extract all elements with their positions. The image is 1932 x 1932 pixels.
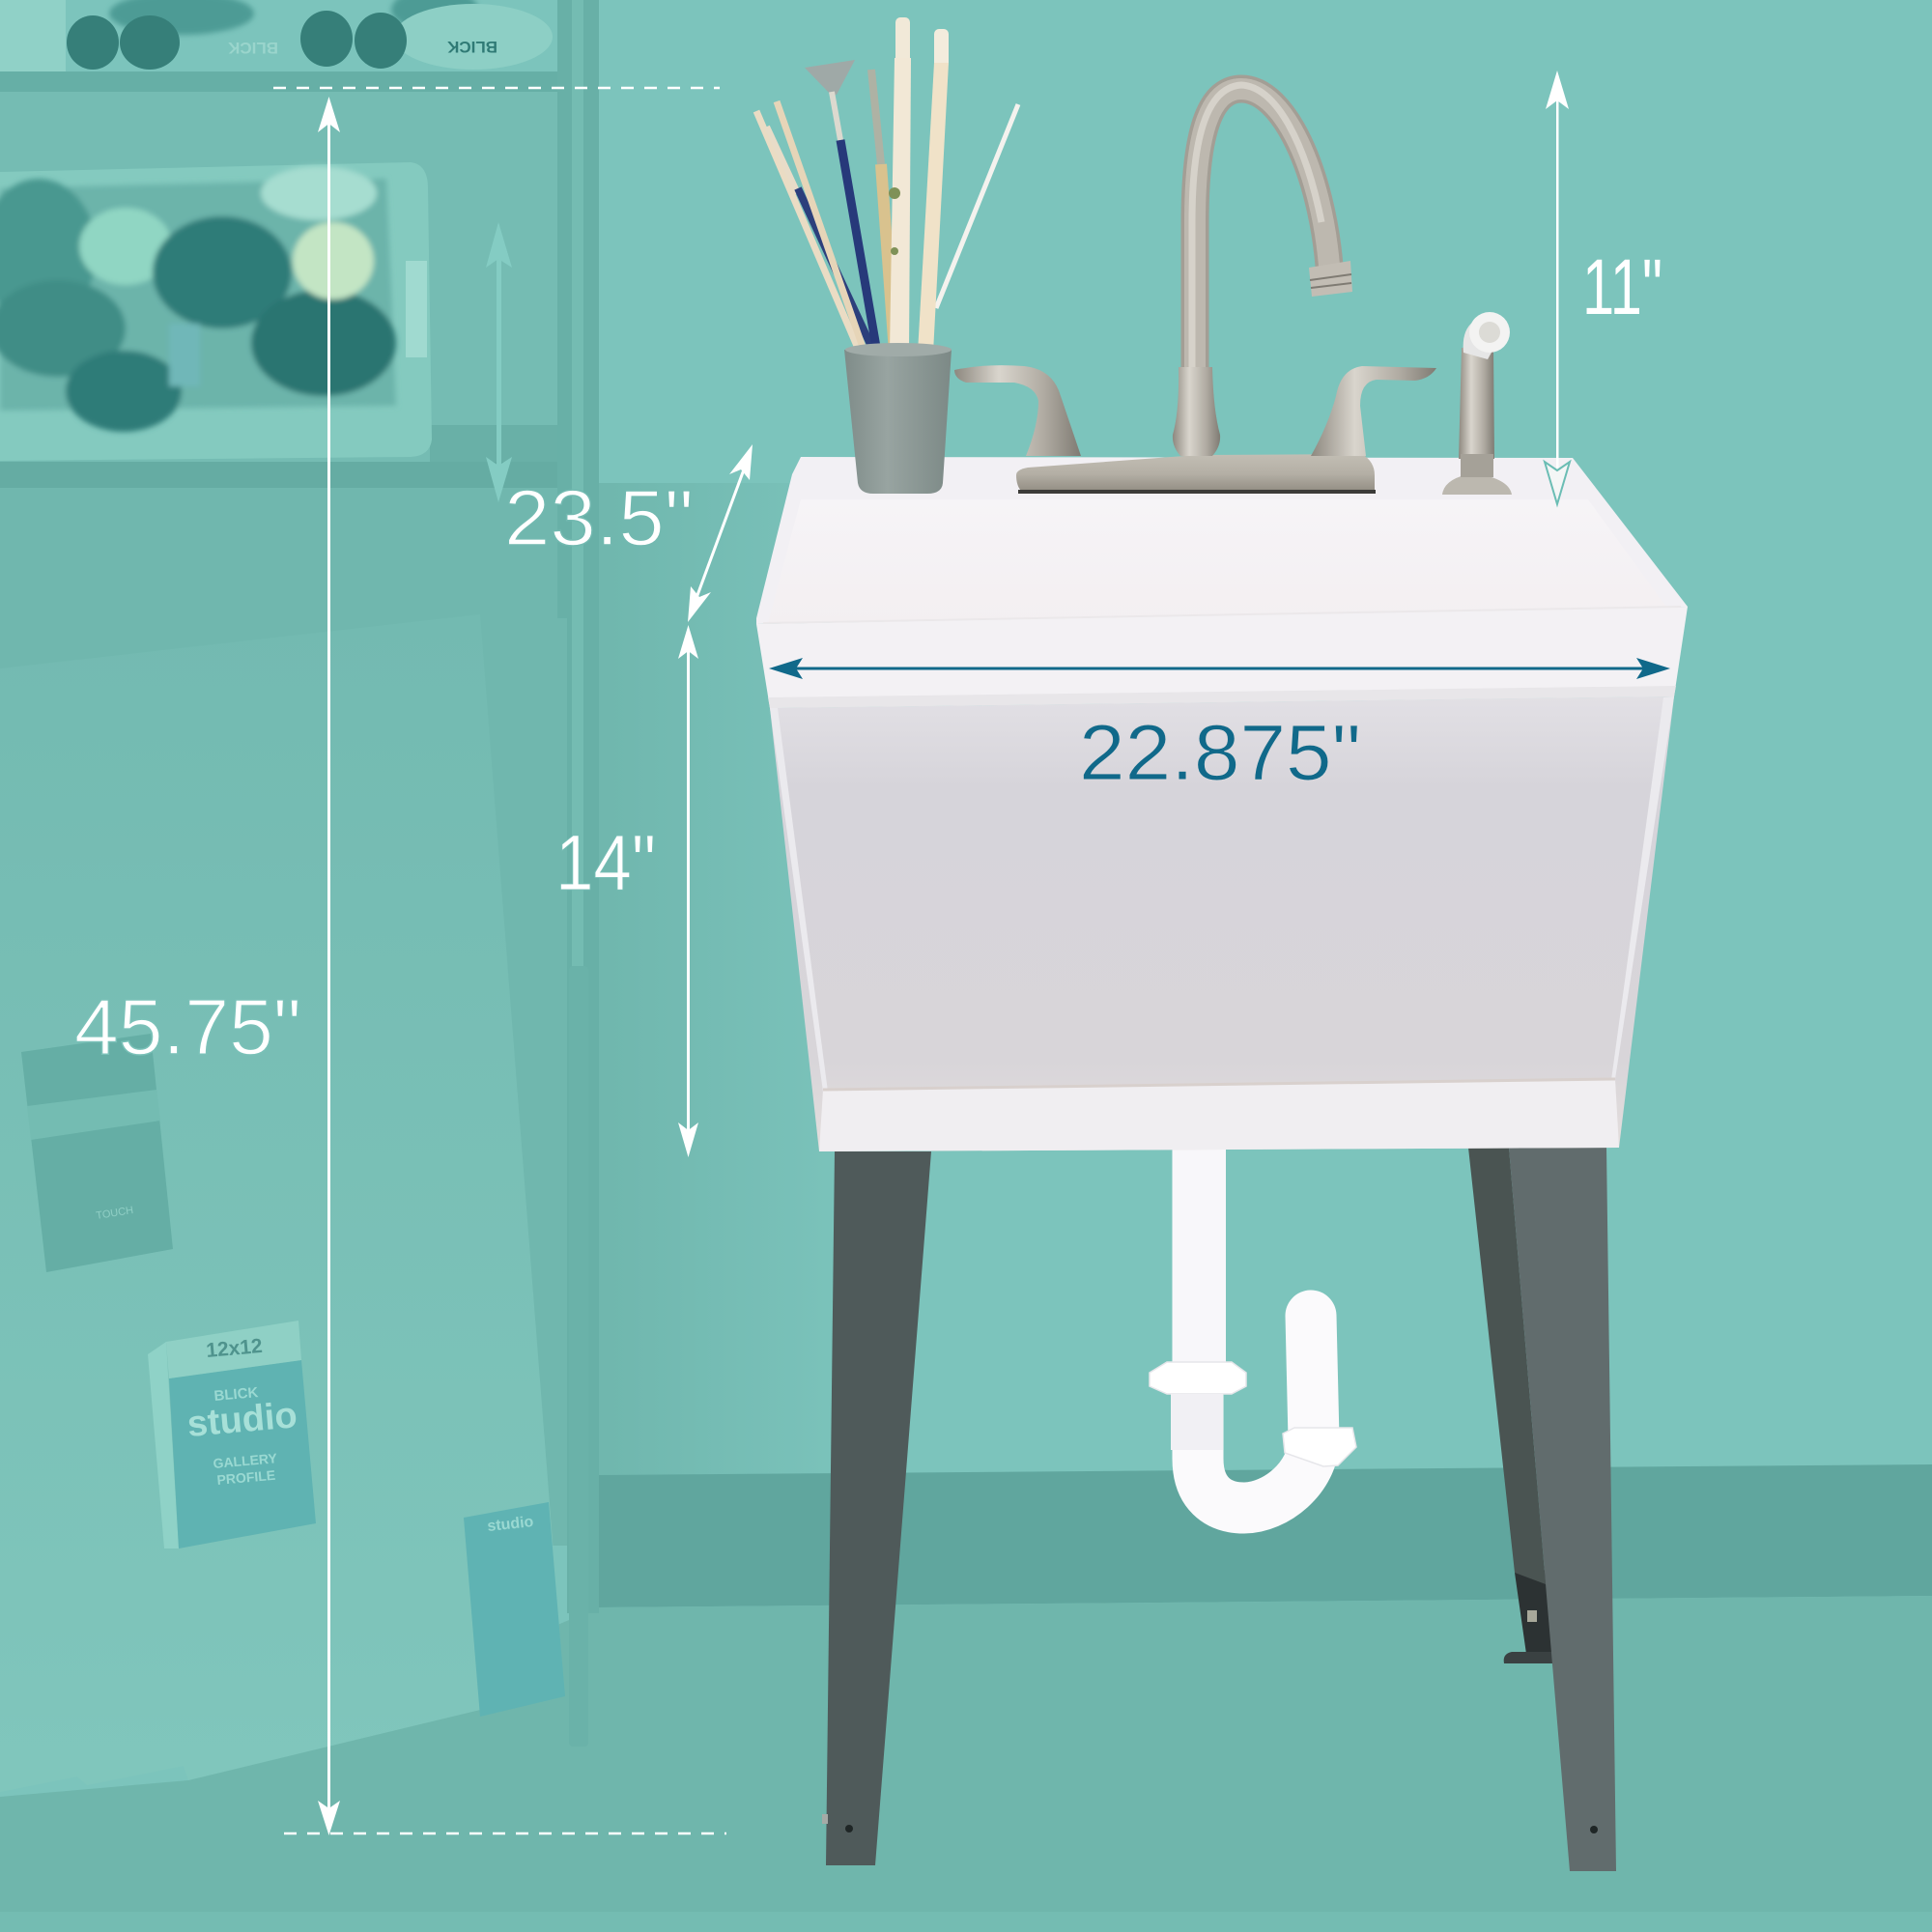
- tub bottom lip: [819, 1079, 1619, 1151]
- right handle: [1311, 366, 1436, 456]
- tub body: [770, 696, 1674, 1151]
- canvas label: touch: TOUCH: [96, 1205, 134, 1222]
- left leg: [822, 1151, 931, 1865]
- top shelf items: BLICK: [227, 39, 278, 57]
- canvas label: studio: [464, 1502, 565, 1717]
- right leg with bracket: [1468, 1148, 1616, 1871]
- gooseneck body: [1195, 89, 1329, 386]
- gooseneck spout: [1195, 89, 1329, 386]
- background: left wall shade: [0, 483, 869, 1546]
- left handle: [954, 365, 1081, 456]
- arrow: 22.875 width: [769, 658, 1670, 679]
- thin white brush: [936, 104, 1018, 308]
- fan brush: [805, 60, 877, 353]
- arrow: 23.5 depth: [688, 444, 753, 622]
- top shelf: [0, 71, 557, 92]
- canvas label: blick studio gallery profile: [148, 1321, 316, 1548]
- canvas label: blick studio gallery profile: GALLERY: [213, 1450, 278, 1471]
- shelf post: [557, 0, 599, 1747]
- background: floor front strip: [0, 1912, 1932, 1932]
- label: 14: 14": [555, 819, 656, 907]
- large brush: [889, 17, 911, 353]
- canvas label: studio: studio: [487, 1514, 534, 1535]
- brush one: [756, 111, 860, 353]
- cup: [844, 343, 952, 494]
- canvas label: touch: [21, 1034, 173, 1272]
- tub left highlight: [770, 708, 828, 1092]
- label: 22.875: 22.875": [1079, 709, 1361, 797]
- dashed reference line top: [273, 87, 720, 89]
- rim top line: [763, 607, 1681, 623]
- plate shadow: [1018, 490, 1376, 494]
- canvas label: blick studio gallery profile: 12x12: [205, 1335, 264, 1362]
- drain p-trap: [1150, 1150, 1356, 1508]
- label: 23.5: 23.5": [504, 474, 694, 562]
- front rim: [756, 607, 1688, 708]
- sink tub: [756, 457, 1688, 1151]
- canvas label: blick studio gallery profile: studio: [185, 1395, 298, 1445]
- arrow: 11 height: [1545, 71, 1570, 504]
- deck plate: [1016, 454, 1375, 494]
- faucet: [954, 85, 1436, 494]
- basin interior: [768, 499, 1666, 623]
- faded shelving scene: [0, 0, 599, 1792]
- canvas label: blick studio gallery profile: BLICK: [213, 1384, 259, 1405]
- rim lower band: [768, 686, 1676, 708]
- front canvas: [0, 614, 564, 1792]
- top shelf items: [0, 0, 553, 71]
- paint tray: [0, 162, 557, 464]
- second large brush: [918, 29, 949, 353]
- tub right highlight: [1611, 696, 1674, 1080]
- brush three: [777, 101, 865, 353]
- back canvas: [0, 1038, 188, 1792]
- top shelf items: BLICK: [446, 38, 497, 56]
- arrow: 45.75 height: [318, 97, 340, 1835]
- dashed reference line bottom: [284, 1833, 726, 1834]
- brush two: [767, 127, 874, 353]
- paint brushes in cup: [756, 17, 1018, 494]
- side sprayer: [1442, 312, 1512, 495]
- faucet stem base: [1173, 367, 1220, 456]
- canvas label: blick studio gallery profile: PROFILE: [216, 1467, 276, 1488]
- gooseneck highlight: [1192, 85, 1321, 386]
- label: 45.75: 45.75": [74, 983, 301, 1071]
- background: floor: [0, 1596, 1932, 1932]
- background: upper left wall: [0, 92, 599, 483]
- label: 11: 11": [1582, 243, 1662, 331]
- background: baseboard: [599, 1464, 1932, 1607]
- narrow brush: [871, 70, 895, 353]
- tub top deck: [756, 457, 1688, 624]
- middle shelf: [0, 462, 558, 488]
- lip crease: [823, 1079, 1615, 1090]
- arrow: 14 height: [678, 625, 698, 1157]
- aerator: [1309, 261, 1352, 297]
- faded arrow: [486, 222, 512, 502]
